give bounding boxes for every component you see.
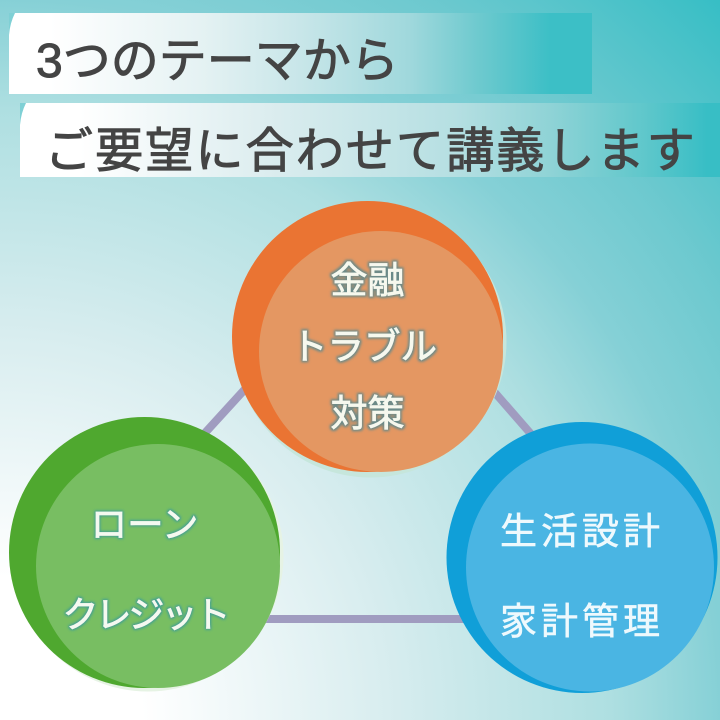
- label: 生活設計家計管理: 家計管理: [500, 601, 664, 642]
- label: 金融トラブル対策: トラブル: [291, 326, 437, 367]
- heading band: first line: [9, 13, 592, 94]
- label: ローンクレジット: クレジット: [62, 594, 228, 635]
- heading band: second line: [20, 103, 720, 178]
- heading text: first line: 3つのテーマから: [36, 35, 399, 88]
- label: 金融トラブル対策: 対策: [330, 393, 404, 434]
- heading text: second line: ご要望に合わせて講義します: [45, 125, 697, 178]
- circle: finance trouble: [232, 201, 506, 478]
- circle: loans and credit: [9, 417, 284, 692]
- label: 生活設計家計管理: [500, 511, 664, 642]
- label: 金融トラブル対策: [291, 260, 437, 434]
- label: ローンクレジット: ローン: [91, 504, 198, 545]
- label: 生活設計家計管理: 生活設計: [500, 511, 664, 552]
- label: ローンクレジット: [62, 504, 228, 635]
- label: 金融トラブル対策: 金融: [330, 260, 404, 301]
- circle: life planning: [446, 422, 718, 693]
- connector triangle: [204, 387, 531, 619]
